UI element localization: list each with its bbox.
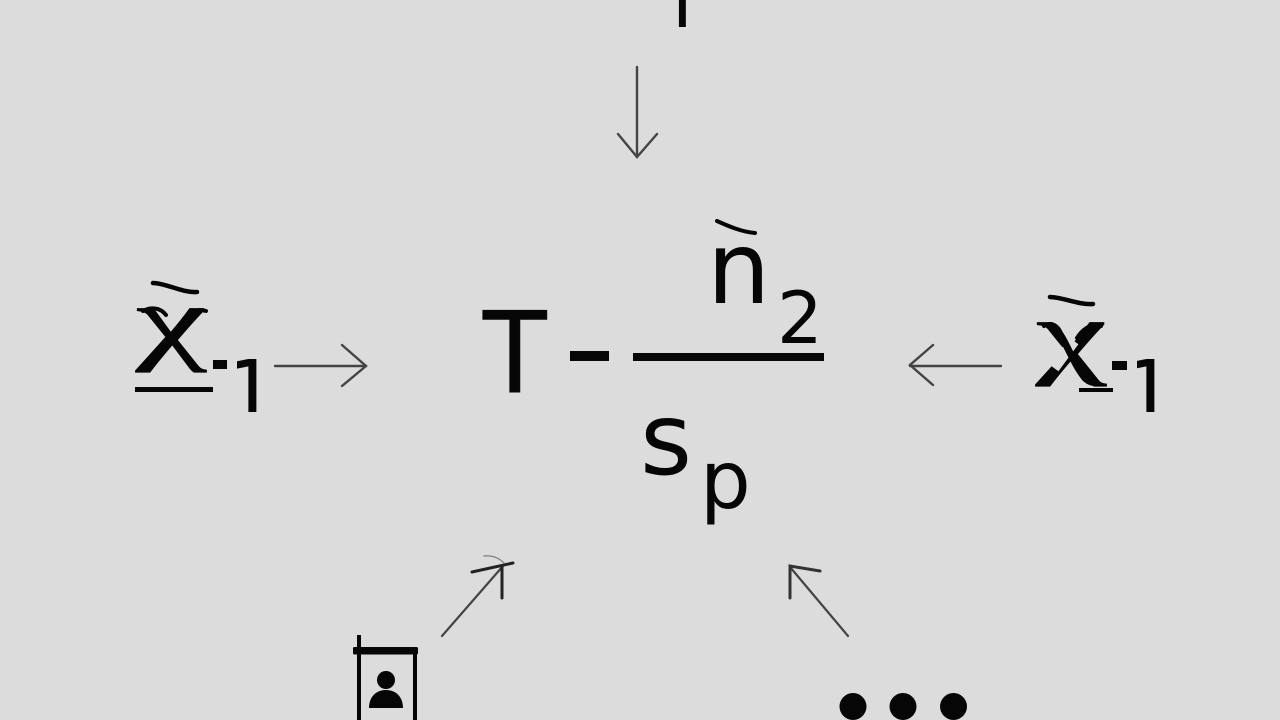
- icon: framed person portrait: [353, 635, 418, 720]
- infographic canvas: [135, 0, 1154, 720]
- central formula: [482, 210, 824, 527]
- denominator: s sub p: s: [640, 381, 692, 498]
- numerator: n tilde sub 2: n: [707, 210, 770, 327]
- denominator: s sub p: [640, 381, 751, 527]
- arrow: lower right pointing up left: [790, 566, 848, 636]
- icon: three dots: [840, 693, 967, 720]
- numerator: n tilde sub 2: [707, 210, 823, 360]
- numerator: n tilde sub 2: 2: [777, 276, 823, 360]
- T symbol: T: [482, 288, 548, 419]
- left term: x tilde sub 1: 1: [225, 344, 277, 439]
- minus sign: [570, 351, 609, 361]
- arrow: right pointing left: [910, 345, 1001, 385]
- right term: x tilde sub 1: [1035, 294, 1154, 412]
- left term: x tilde sub 1: χ: [135, 268, 207, 373]
- fraction bar: [633, 353, 824, 361]
- arrow: top pointing down: [618, 67, 657, 157]
- denominator: s sub p: p: [700, 434, 751, 527]
- arrow: lower left pointing up right: [442, 556, 513, 636]
- right term: x tilde sub 1: χ: [1035, 282, 1107, 387]
- arrow: left pointing right: [275, 345, 366, 386]
- right term: x tilde sub 1: 1: [1123, 344, 1175, 439]
- left term: x tilde sub 1: [135, 280, 256, 412]
